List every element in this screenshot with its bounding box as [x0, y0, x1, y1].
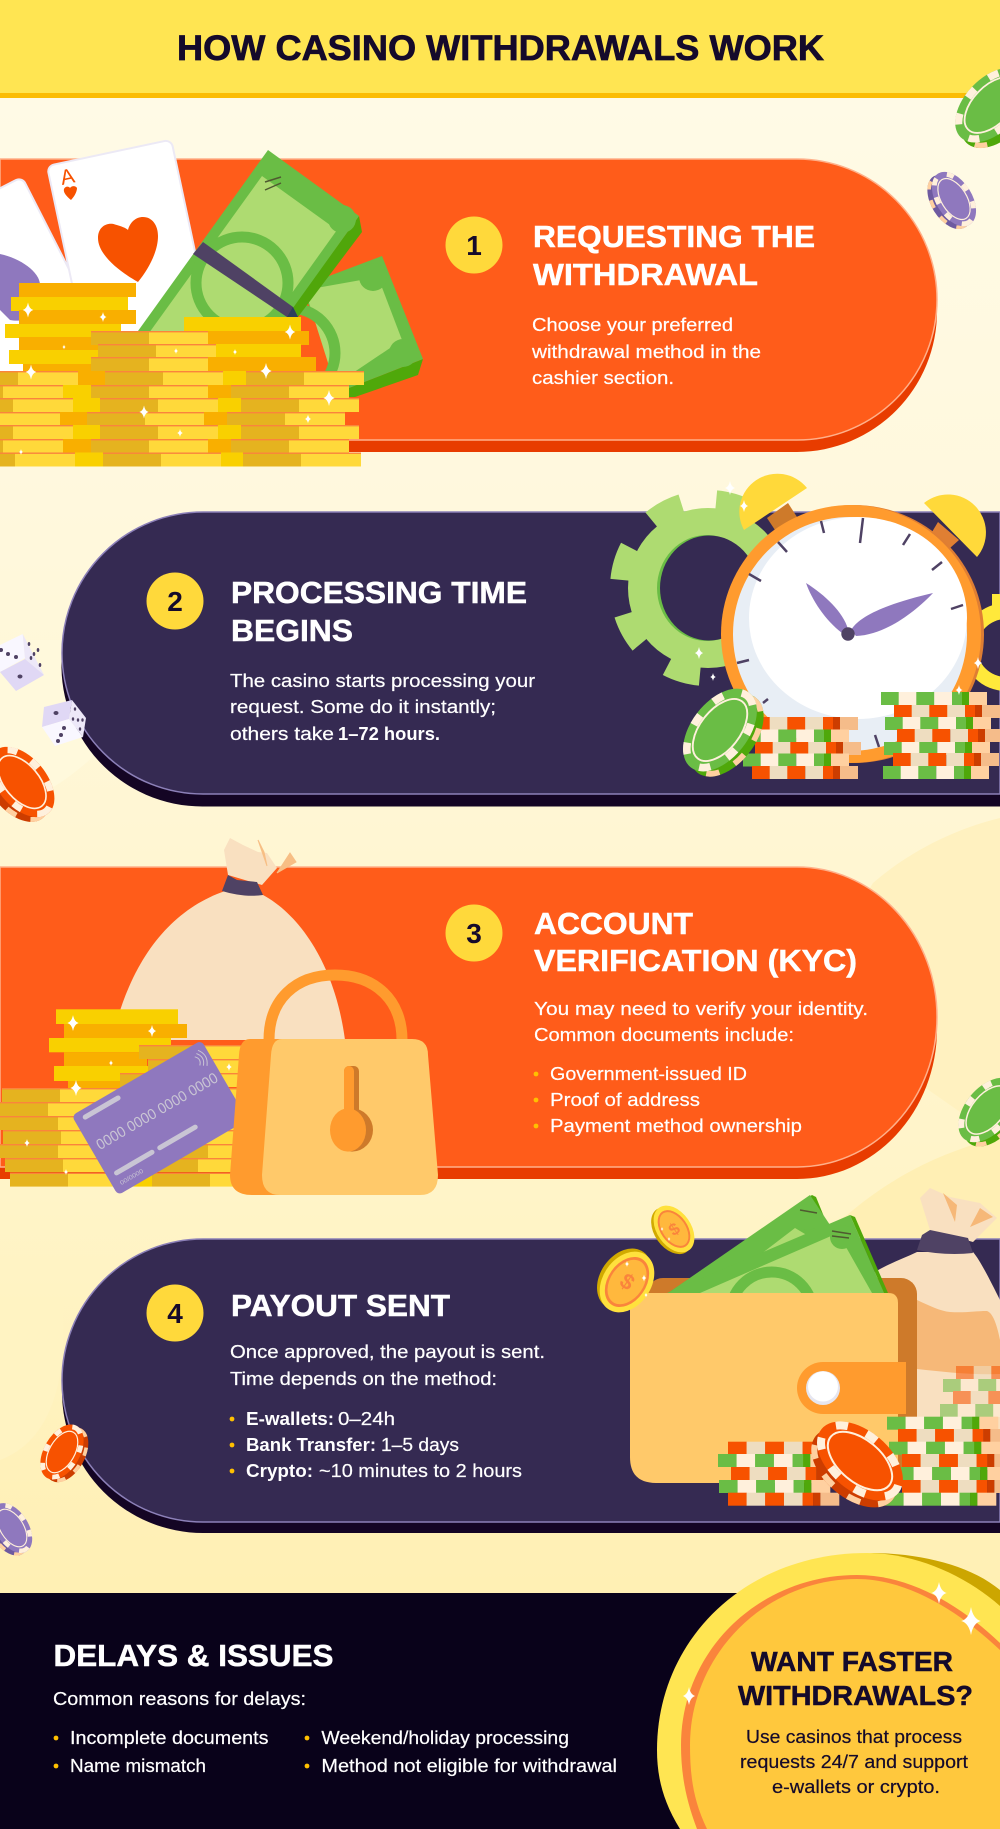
sparkles: [19, 302, 335, 455]
chip stack right: [881, 692, 1000, 779]
title: HOW CASINO WITHDRAWALS WORK: [177, 29, 824, 68]
delay reasons left: Name mismatch: [70, 1756, 206, 1776]
ace of hearts card: A: [58, 164, 77, 190]
panel: step 2 processing time: [61, 512, 1000, 807]
body step 2: 1–72 hours.: [338, 724, 440, 744]
body step 1: withdrawal method in the: [531, 342, 761, 362]
delay reasons right: Method not eligible for withdrawal: [321, 1756, 617, 1776]
faded chip stack: [940, 1366, 1000, 1417]
number badge 4: 4: [167, 1298, 183, 1329]
number badge 2: [146, 572, 204, 630]
delay reasons left: [54, 1728, 268, 1776]
number badge 3: 3: [466, 918, 482, 949]
document list: [534, 1064, 802, 1136]
payout method list: E-wallets:: [246, 1409, 334, 1429]
number badge 1: 1: [466, 230, 482, 261]
delay reasons left: Incomplete documents: [70, 1728, 268, 1748]
credit card: 0000 0000 0000 0000: [93, 1070, 221, 1154]
callout body: Use casinos that process: [746, 1727, 962, 1747]
payout method list: [230, 1409, 522, 1481]
panel: step 1 requesting the withdrawal: [0, 159, 937, 452]
chip: purple lower left: [0, 1496, 41, 1563]
money bag behind wallet: [870, 1188, 1000, 1470]
body step 4: Once approved, the payout is sent.: [230, 1342, 545, 1362]
die lower: [42, 700, 86, 746]
heading step 1: [533, 219, 815, 292]
body step 2: [230, 671, 535, 744]
body step 2: request. Some do it instantly;: [230, 697, 496, 717]
leaning green chip: [668, 675, 778, 790]
ace of hearts card: [47, 140, 213, 362]
leaning orange chip: [797, 1406, 918, 1523]
callout body: [740, 1727, 968, 1797]
delay reasons right: Weekend/holiday processing: [321, 1728, 569, 1748]
heading step 2: BEGINS: [231, 613, 353, 648]
clock hands: [806, 583, 933, 641]
coin sparkles: [625, 1227, 670, 1298]
heading step 4: PAYOUT SENT: [231, 1288, 450, 1323]
keyhole: [330, 1066, 373, 1152]
body step 3: [534, 999, 868, 1045]
wallet front: [630, 1293, 898, 1483]
big gold coin: $: [615, 1268, 639, 1295]
chip stack left: [743, 717, 861, 779]
heading step 2: [231, 575, 527, 648]
panel: step 3 account verification: [0, 867, 937, 1179]
rear banknote: [245, 256, 423, 398]
clock sparkles: [695, 481, 982, 695]
credit card: 00/0000: [119, 1168, 146, 1187]
document list: Payment method ownership: [550, 1116, 802, 1136]
purple suit: [0, 254, 40, 321]
body step 1: [531, 315, 761, 388]
panel: step 4 payout sent: [62, 1239, 1000, 1533]
illustration: cards, cash and coins: [0, 140, 423, 466]
heading step 1: WITHDRAWAL: [533, 257, 758, 292]
chip: small orange: [31, 1417, 97, 1490]
chip: green right middle: [947, 1067, 1000, 1158]
payout method list: 0–24h: [338, 1409, 395, 1429]
callout body: e-wallets or crypto.: [772, 1777, 940, 1797]
payout method list: ~10 minutes to 2 hours: [319, 1461, 522, 1481]
chip: purple top right: [918, 164, 985, 237]
gold coin stacks: [0, 283, 364, 466]
heading step 2: PROCESSING TIME: [231, 575, 527, 610]
panel: delays and issues: [0, 1593, 1000, 1829]
header banner: [0, 0, 1000, 98]
bell left: [739, 474, 807, 530]
wallet back: [647, 1278, 917, 1468]
front banknote bundle: [138, 150, 362, 397]
bell right: [924, 495, 986, 557]
payout method list: Bank Transfer:: [246, 1435, 376, 1455]
small gold coin: $: [665, 1219, 684, 1240]
big gold coin: [585, 1238, 666, 1323]
chip: green top right: [941, 54, 1000, 162]
chip stack left: [718, 1442, 842, 1506]
green gear: [612, 492, 804, 684]
document list: Proof of address: [550, 1090, 700, 1110]
illustration: alarm clock, gear and chips: [612, 474, 1000, 790]
sparkles: [24, 1015, 232, 1175]
chip stack right: [885, 1417, 1000, 1506]
number badge 1: [446, 216, 502, 274]
number badge 4: [146, 1284, 204, 1342]
body step 1: cashier section.: [532, 368, 674, 388]
callout heading: WANT FASTER: [751, 1646, 953, 1677]
number badge 3: [446, 904, 502, 962]
heading step 3: [534, 906, 857, 978]
illustration: wallet, money bag and chips: [585, 1188, 1000, 1523]
money bag: [112, 838, 345, 1040]
credit card: [72, 1040, 248, 1195]
small gold coin: [643, 1198, 703, 1262]
banknotes in wallet: [667, 1195, 888, 1354]
callout body: requests 24/7 and support: [740, 1752, 968, 1772]
delay reasons right: [305, 1728, 617, 1776]
payout method list: 1–5 days: [381, 1435, 459, 1455]
left playing card: [0, 177, 113, 413]
die upper: [0, 634, 44, 691]
body step 4: Time depends on the method:: [230, 1369, 497, 1389]
dice: [0, 634, 86, 746]
callout heading: WITHDRAWALS?: [738, 1680, 973, 1711]
wallet clasp: [797, 1362, 906, 1414]
body step 1: Choose your preferred: [532, 315, 733, 335]
document list: Government-issued ID: [550, 1064, 747, 1084]
callout: want faster withdrawals coin: [657, 1553, 1000, 1829]
number badge 2: 2: [167, 586, 183, 617]
callout sparkles: [683, 1582, 981, 1705]
padlock: [230, 975, 438, 1195]
payout method list: Crypto:: [246, 1461, 313, 1481]
clock face: [721, 505, 984, 763]
intro text: Common reasons for delays:: [53, 1689, 306, 1709]
yellow gear: [962, 594, 1000, 691]
heading delays: DELAYS & ISSUES: [54, 1638, 334, 1673]
body step 4: [230, 1342, 545, 1389]
heading step 3: ACCOUNT: [534, 906, 693, 941]
coin stacks: [0, 1009, 270, 1187]
body step 2: The casino starts processing your: [230, 671, 535, 691]
callout heading: [738, 1646, 973, 1711]
body step 3: You may need to verify your identity.: [534, 999, 868, 1019]
body step 2: others take: [230, 724, 334, 744]
illustration: money bag, coins, card and padlock: [0, 838, 438, 1195]
heading step 1: REQUESTING THE: [533, 219, 815, 254]
chip: orange left: [0, 735, 67, 834]
body step 3: Common documents include:: [534, 1025, 794, 1045]
heading step 3: VERIFICATION (KYC): [534, 943, 857, 978]
